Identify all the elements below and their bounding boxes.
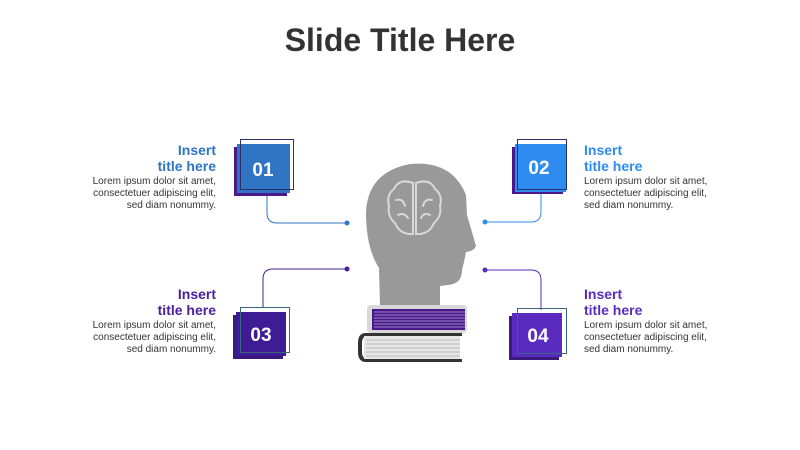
text block 01 xyxy=(158,142,216,174)
number box 03: 03 xyxy=(250,325,272,346)
icon: books xyxy=(358,305,467,362)
body 02: consectetuer adipiscing elit, xyxy=(584,188,707,199)
text block 02: title here xyxy=(584,158,642,174)
icon: brain xyxy=(388,181,441,234)
connector 03 xyxy=(263,266,350,307)
body 02 xyxy=(584,176,707,211)
body 04: Lorem ipsum dolor sit amet, xyxy=(584,320,707,331)
text block 03: Insert xyxy=(178,286,216,302)
text block 01: Insert xyxy=(178,142,216,158)
body 03: sed diam nonummy. xyxy=(127,344,216,355)
body 04: consectetuer adipiscing elit, xyxy=(584,332,707,343)
icon: head xyxy=(366,164,476,306)
number box 04 xyxy=(509,308,566,360)
number box 04: 04 xyxy=(527,326,549,347)
text block 04: Insert xyxy=(584,286,622,302)
connector 01 xyxy=(267,190,350,226)
body 01 xyxy=(93,176,216,211)
body 01: sed diam nonummy. xyxy=(127,200,216,211)
number box 01: 01 xyxy=(252,160,274,181)
text block 03 xyxy=(158,286,216,318)
body 04: sed diam nonummy. xyxy=(584,344,673,355)
number box 01 xyxy=(234,140,294,196)
title: Slide Title Here xyxy=(285,22,515,58)
connector 04 xyxy=(482,268,541,310)
text block 04 xyxy=(584,286,642,318)
connector 02 xyxy=(482,190,541,224)
body 01: consectetuer adipiscing elit, xyxy=(93,188,216,199)
text block 02: Insert xyxy=(584,142,622,158)
body 02: Lorem ipsum dolor sit amet, xyxy=(584,176,707,187)
body 01: Lorem ipsum dolor sit amet, xyxy=(93,176,216,187)
body 02: sed diam nonummy. xyxy=(584,200,673,211)
body 03: consectetuer adipiscing elit, xyxy=(93,332,216,343)
text block 03: title here xyxy=(158,302,216,318)
number box 03 xyxy=(233,308,290,359)
body 04 xyxy=(584,320,707,355)
text block 04: title here xyxy=(584,302,642,318)
text block 02 xyxy=(584,142,642,174)
number box 02: 02 xyxy=(528,158,550,179)
text block 01: title here xyxy=(158,158,216,174)
body 03: Lorem ipsum dolor sit amet, xyxy=(93,320,216,331)
number box 02 xyxy=(512,140,566,194)
body 03 xyxy=(93,320,216,355)
